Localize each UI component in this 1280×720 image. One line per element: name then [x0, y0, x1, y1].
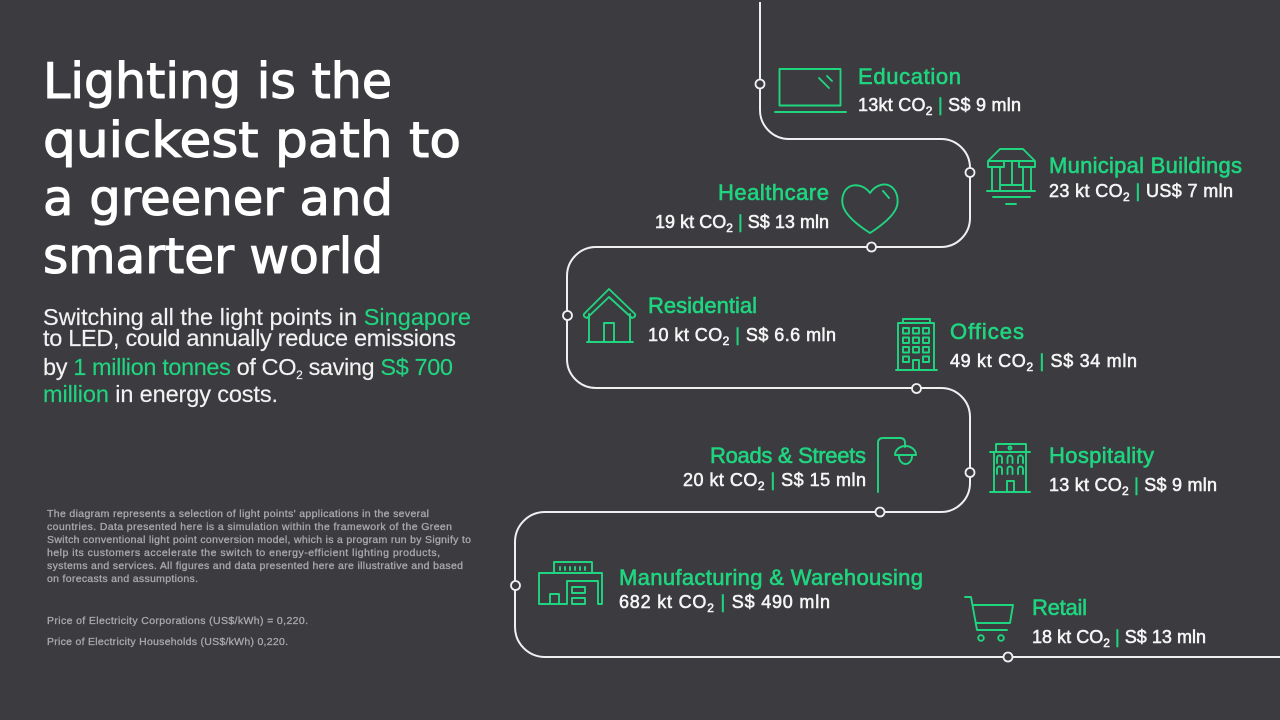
stats: Roads & Streets: | S$ 15 mln	[770, 470, 866, 490]
stats: Healthcare: 19 kt CO	[655, 212, 726, 232]
stats: Manufacturing & Warehousing: 2	[707, 601, 714, 615]
stats: Healthcare: | S$ 13 mln	[738, 212, 829, 232]
stats: Offices: 2	[1026, 360, 1033, 374]
icon: hotel	[990, 444, 1030, 492]
title: smarter world	[43, 228, 383, 285]
item: Retail	[965, 595, 1206, 650]
text block: disclaimer: on forecasts and assumptions.	[47, 573, 198, 585]
stats: Hospitality: 2	[1122, 484, 1129, 498]
icon: office tower	[896, 319, 937, 370]
label: Residential: Residential	[648, 293, 757, 318]
stats: Retail: 2	[1103, 636, 1110, 650]
text block: electricity prices: Price of Electricity Households (US$/kWh) 0,220.	[47, 636, 288, 648]
title: Lighting is the	[43, 53, 392, 110]
item: Hospitality	[990, 443, 1217, 498]
title: a greener and	[43, 170, 393, 227]
text block: electricity prices	[47, 615, 308, 648]
item: Roads & Streets	[683, 438, 916, 493]
title	[43, 53, 461, 285]
stats: Residential: 10 kt CO	[648, 325, 722, 345]
stats: Roads & Streets: 2	[758, 479, 765, 493]
title: quickest path to	[43, 112, 461, 169]
item: Healthcare	[655, 180, 898, 235]
label: Education: Education	[858, 64, 961, 89]
winding path with nodes	[511, 2, 1280, 662]
item: Residential	[584, 289, 836, 348]
icon: heart	[842, 184, 898, 233]
stats: Municipal Buildings: | US$ 7 mln	[1136, 181, 1233, 201]
text block: summary	[43, 304, 471, 407]
icon: laptop	[775, 69, 846, 112]
text block: disclaimer	[47, 508, 471, 585]
stats: Hospitality: | S$ 9 mln	[1134, 475, 1217, 495]
stats: Education: | S$ 9 mln	[938, 95, 1021, 115]
text block: disclaimer: systems and services. All figures and data presented here are illustrative and based	[47, 560, 463, 572]
stats: Education: 13kt CO	[858, 95, 926, 115]
stats: Roads & Streets: 20 kt CO	[683, 470, 757, 490]
stats: Retail: | S$ 13 mln	[1115, 627, 1206, 647]
label: Offices: Offices	[950, 319, 1024, 344]
label: Roads & Streets: Roads & Streets	[710, 443, 866, 468]
text block: summary: by 1 million tonnes of CO	[43, 354, 297, 380]
text block: disclaimer: Switch conventional light point conversion model, which is a program run by Signify to	[47, 534, 471, 546]
stats: Municipal Buildings: 23 kt CO	[1049, 181, 1123, 201]
stats: Residential: | S$ 6.6 mln	[735, 325, 836, 345]
text block: disclaimer: The diagram represents a selection of light points' applications in the several	[47, 508, 429, 520]
stats: Offices: | S$ 34 mln	[1039, 351, 1137, 371]
label: Retail: Retail	[1032, 595, 1087, 620]
text block: disclaimer: help its customers accelerate the switch to energy-efficient lighting products,	[47, 547, 440, 559]
stats: Education: 2	[926, 104, 933, 118]
icon: municipal building	[987, 149, 1035, 204]
item: Manufacturing & Warehousing	[539, 562, 923, 615]
label: Healthcare: Healthcare	[718, 180, 829, 205]
stats: Manufacturing & Warehousing: | S$ 490 mln	[720, 592, 830, 612]
stats: Offices: 49 kt CO	[950, 351, 1026, 371]
item: Municipal Buildings	[987, 149, 1242, 204]
label: Municipal Buildings: Municipal Buildings	[1049, 153, 1242, 178]
text block: summary: 2	[296, 368, 303, 382]
item: Education	[775, 64, 1021, 118]
text block: summary: Switching all the light points in Singapore	[43, 304, 471, 330]
icon: shopping cart	[965, 597, 1013, 641]
text block: summary: million in energy costs.	[43, 381, 278, 407]
icon: street lamp	[878, 438, 916, 492]
stats: Healthcare: 2	[726, 221, 733, 235]
stats: Retail: 18 kt CO	[1032, 627, 1103, 647]
text block: summary: saving	[302, 354, 381, 380]
icon: factory	[539, 562, 602, 604]
stats: Municipal Buildings: 2	[1123, 190, 1130, 204]
text block: summary: S$ 700	[380, 354, 453, 380]
stats: Residential: 2	[723, 334, 730, 348]
icon: house	[584, 289, 635, 342]
label: Manufacturing & Warehousing: Manufacturing & Warehousing	[619, 565, 923, 590]
text block: electricity prices: Price of Electricity Corporations (US$/kWh) = 0,220.	[47, 615, 308, 627]
stats: Hospitality: 13 kt CO	[1049, 475, 1122, 495]
text block: summary: to LED, could annually reduce emissions	[43, 325, 456, 351]
stats: Manufacturing & Warehousing: 682 kt CO	[619, 592, 706, 612]
label: Hospitality: Hospitality	[1049, 443, 1154, 468]
text block: disclaimer: countries. Data presented here is a simulation within the framework of the Green	[47, 521, 452, 533]
item: Offices	[896, 319, 1137, 374]
